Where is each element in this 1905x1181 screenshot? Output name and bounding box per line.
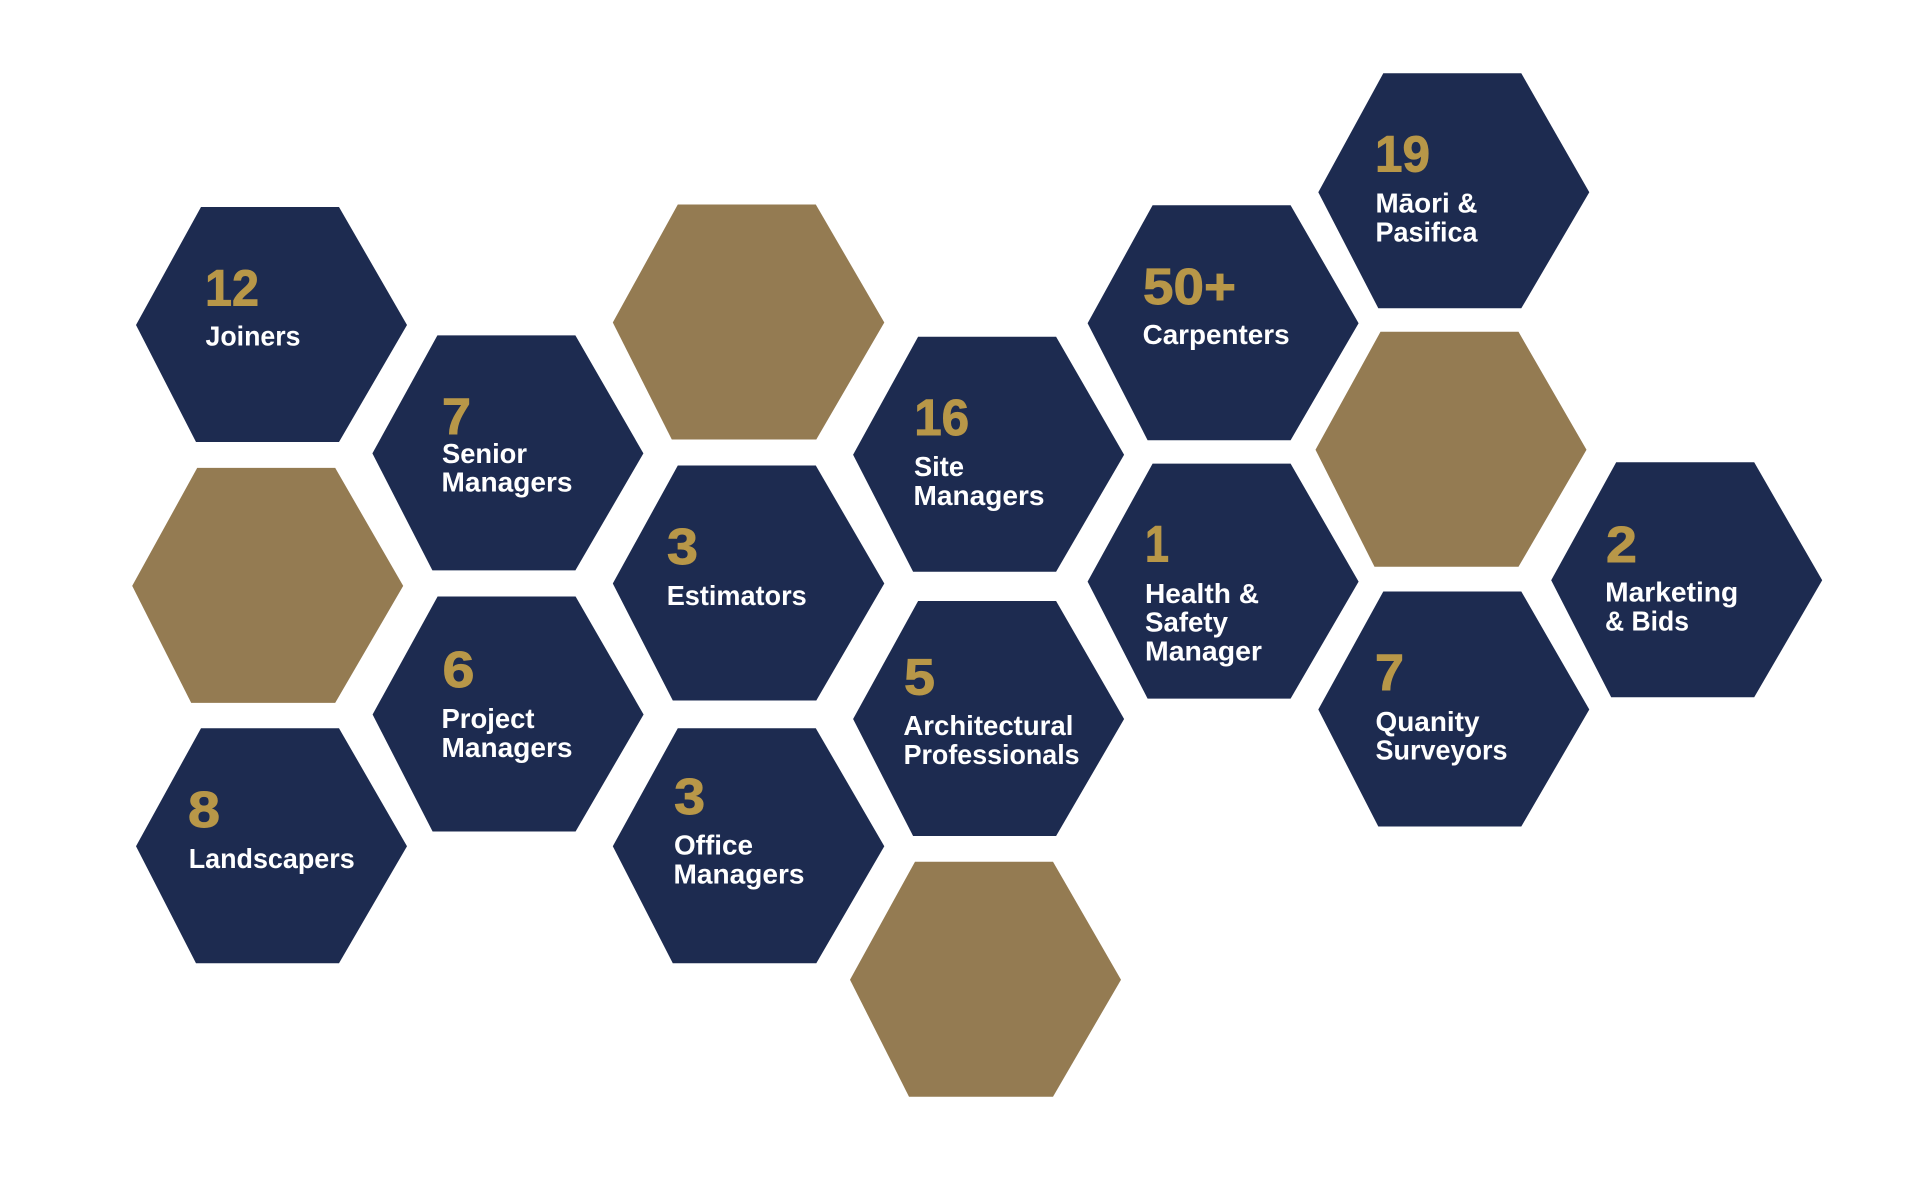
hexagon: 1 Health & Safety Manager: Safety — [1145, 606, 1228, 638]
hexagon: 8 Landscapers — [136, 728, 407, 963]
hexagon: 3 Estimators — [613, 466, 884, 700]
hexagon: 19 Māori & Pasifica: Māori & — [1376, 188, 1478, 219]
hexagon: 16 Site Managers — [853, 337, 1124, 572]
hexagon: 8 Landscapers: Landscapers — [189, 843, 355, 874]
hexagon: 8 Landscapers: 8 — [188, 781, 220, 838]
hexagon: 5 Architectural Professionals: Architectural — [903, 710, 1073, 741]
hexagon: 1 Health & Safety Manager: 1 — [1145, 516, 1169, 572]
hexagon: 6 Project Managers: 6 — [442, 641, 474, 698]
hexagon: 2 Marketing & Bids: & Bids — [1605, 605, 1689, 636]
hexagon: 3 Office Managers: 3 — [674, 768, 705, 825]
hexagon: gold top centre — [613, 204, 884, 440]
hexagon: 16 Site Managers: Managers — [914, 480, 1044, 511]
hexagon: 2 Marketing & Bids: Marketing — [1605, 577, 1738, 608]
hexagon: 16 Site Managers: 16 — [914, 389, 969, 446]
hexagon: 7 Quanity Surveyors: Surveyors — [1376, 734, 1508, 766]
hexagon: 3 Office Managers — [613, 728, 884, 963]
hexagon: 2 Marketing & Bids: 2 — [1606, 516, 1637, 573]
hexagon: gold left — [132, 468, 403, 703]
hexagon: 3 Office Managers: Managers — [674, 859, 804, 890]
hexagon: 7 Quanity Surveyors — [1318, 592, 1589, 826]
hexagon: 7 Senior Managers: Senior — [442, 438, 527, 469]
hexagon: 12 Joiners — [136, 207, 407, 442]
hexagon: 7 Quanity Surveyors: 7 — [1375, 644, 1404, 701]
hexagon: 19 Māori & Pasifica: Pasifica — [1376, 217, 1478, 248]
hexagon: 2 Marketing & Bids — [1551, 462, 1822, 697]
hexagon: 7 Senior Managers: 7 — [442, 388, 471, 445]
hexagon: 16 Site Managers: Site — [914, 451, 964, 482]
hexagon: 7 Senior Managers — [372, 335, 643, 570]
hexagon: 19 Māori & Pasifica — [1318, 73, 1589, 308]
hexagon: 5 Architectural Professionals: 5 — [904, 648, 935, 705]
hexagon: 5 Architectural Professionals: Professionals — [904, 739, 1080, 770]
hexagon: 3 Office Managers: Office — [674, 830, 753, 861]
hexagon: 50+ Carpenters — [1088, 205, 1359, 440]
hexagon: 3 Estimators: 3 — [667, 518, 698, 575]
hexagon: 5 Architectural Professionals — [853, 601, 1124, 836]
hexagon: 6 Project Managers — [373, 596, 644, 832]
hexagon: 1 Health & Safety Manager — [1088, 464, 1359, 699]
hexagon: 3 Estimators: Estimators — [667, 580, 807, 611]
hexagon: 1 Health & Safety Manager: Manager — [1145, 636, 1262, 667]
hexagon: gold right — [1316, 332, 1586, 567]
hexagon: 50+ Carpenters: Carpenters — [1143, 319, 1290, 350]
hexagon: 7 Quanity Surveyors: Quanity — [1376, 706, 1480, 737]
hexagon: gold bottom — [850, 862, 1121, 1097]
hexagon: 7 Senior Managers: Managers — [442, 467, 572, 498]
hexagon: 12 Joiners: Joiners — [206, 321, 300, 352]
hexagon: 19 Māori & Pasifica: 19 — [1375, 126, 1430, 183]
hexagon: 12 Joiners: 12 — [205, 260, 259, 317]
hexagon: 50+ Carpenters: 50+ — [1143, 258, 1236, 315]
hexagon: 6 Project Managers: Managers — [442, 732, 572, 763]
hexagon: 1 Health & Safety Manager: Health & — [1145, 578, 1259, 609]
hexagon: 6 Project Managers: Project — [442, 703, 534, 734]
